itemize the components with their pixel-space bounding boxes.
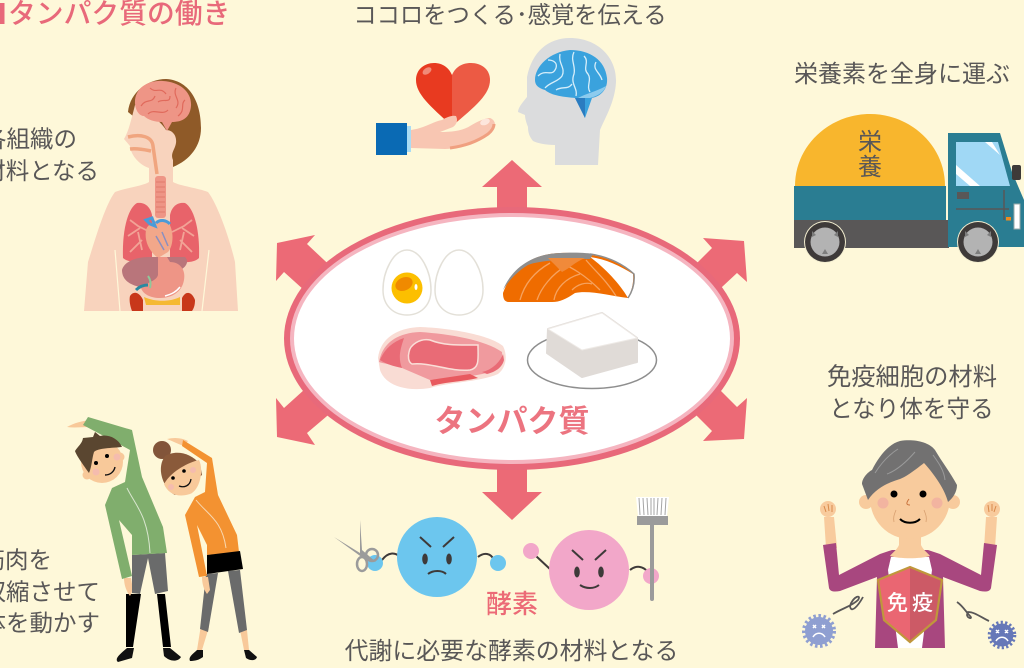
icon: pork steak <box>378 327 506 389</box>
icon: shield: 免疫 <box>887 592 937 615</box>
label: enzyme caption: 代謝に必要な酵素の材料となる <box>345 638 678 665</box>
panel: muscles and movement (bottom left) <box>0 417 257 662</box>
panel: mind and senses (top centre) <box>353 2 667 165</box>
panel: body tissues (top left) <box>0 79 238 311</box>
icon: tanker truck: 養 <box>858 154 882 181</box>
label: immunity: となり体を守る <box>829 396 994 423</box>
icon: blue enzyme with scissors <box>334 517 506 597</box>
icon: whole egg <box>435 250 483 315</box>
panel: enzymes (bottom centre) <box>334 497 678 665</box>
arrows radiating from centre <box>276 160 747 520</box>
central ellipse: protein foods <box>284 207 740 470</box>
icon: tanker truck <box>794 114 1024 263</box>
label: immunity <box>827 364 997 423</box>
icon: tanker truck: 栄 <box>858 129 882 156</box>
label: muscles and movement <box>0 547 100 636</box>
icon: tofu on plate <box>528 313 656 388</box>
label: 酵素: 酵素 <box>486 589 538 619</box>
icon: grandmother with shield <box>804 440 1014 648</box>
heading: タンパク質: タンパク質 <box>434 404 590 439</box>
icon: right germ <box>990 622 1014 648</box>
icon: head with brain <box>518 38 616 165</box>
icon: left germ <box>804 616 834 646</box>
panel: immunity (bottom right) <box>804 364 1014 648</box>
label: nutrient transport: 栄養素を全身に運ぶ <box>794 61 1010 88</box>
icon: woman stretching <box>153 438 257 661</box>
icon: human anatomy <box>84 79 238 311</box>
icon: shield <box>878 567 942 642</box>
icon: salmon fillet <box>503 253 634 302</box>
label: immunity: 免疫細胞の材料 <box>827 364 997 391</box>
label: body tissues <box>0 126 99 184</box>
icon: man stretching <box>67 417 181 662</box>
panel: nutrient transport (top right) <box>794 61 1024 263</box>
icon: boiled egg halved <box>383 250 431 315</box>
label: mind and senses: ココロをつくる･感覚を伝える <box>353 2 667 28</box>
icon: heart in hand <box>376 63 495 155</box>
icon: deflection swooshes <box>833 597 989 621</box>
icon: pink enzyme with brush <box>523 497 669 610</box>
